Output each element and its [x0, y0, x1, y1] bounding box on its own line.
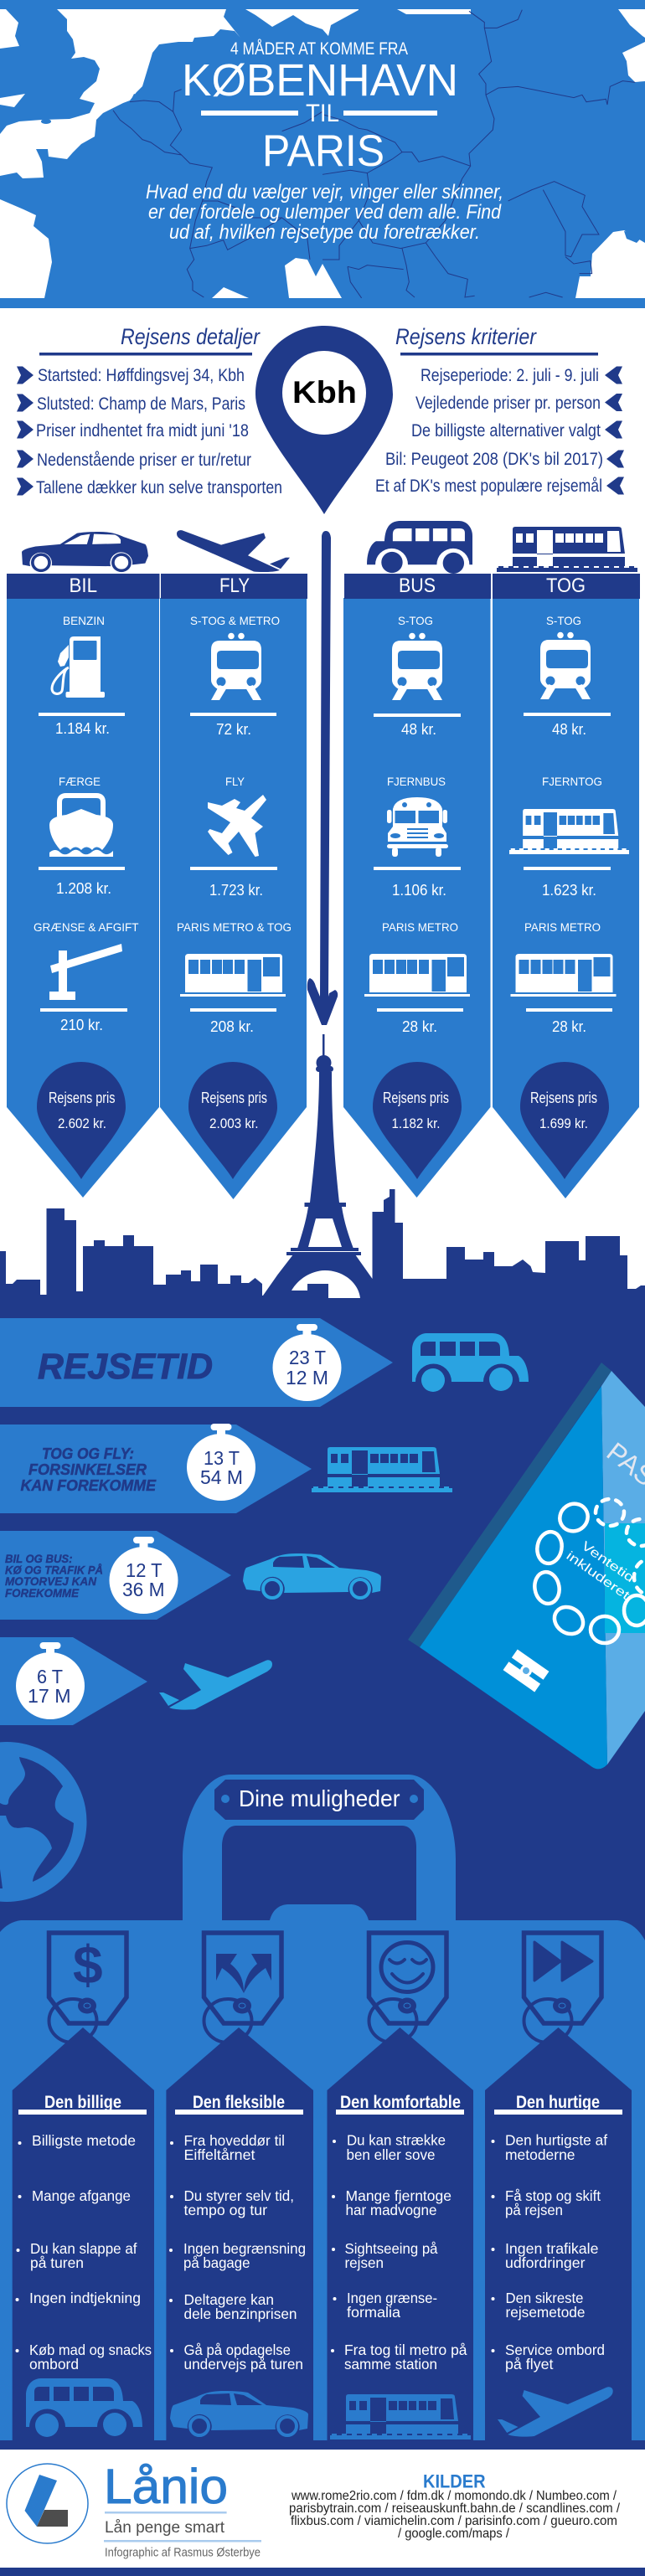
price pin: [188, 1062, 277, 1179]
card list: ombord: [29, 2356, 79, 2372]
item: grænse og afgift: 210 kr.: [60, 1017, 103, 1033]
icon: bus: [412, 1333, 529, 1392]
item: benzin: BENZIN: [63, 614, 105, 627]
heading plate: Dine muligheder: [239, 1785, 400, 1811]
note: TOG OG FLY:: [42, 1445, 134, 1462]
card list: Få stop og skift: [505, 2187, 601, 2204]
card list: samme station: [344, 2356, 437, 2372]
price pin: 1.182 kr.: [392, 1115, 441, 1131]
item: paris metro og tog: PARIS METRO & TOG: [177, 920, 292, 934]
icon: plane: [177, 530, 290, 572]
item: paris metro: [511, 920, 617, 1035]
panel: fly: [160, 574, 307, 1199]
item: s-tog: 48 kr.: [401, 721, 436, 738]
stopwatch: 54 M: [200, 1466, 243, 1488]
title: til: [201, 100, 437, 127]
tag: split arrows: [204, 1933, 281, 2043]
list: Et af DK's mest populære rejsemål: [375, 477, 602, 496]
navy background: [0, 1311, 645, 2450]
card list: Ingen grænse-: [347, 2290, 437, 2306]
item: benzin: [39, 614, 125, 737]
panel: bus: [343, 574, 491, 1198]
icon: globe: [0, 1742, 87, 1902]
icon: train: [330, 2394, 471, 2439]
header: map with title: [0, 0, 645, 308]
card list: Eiffeltårnet: [184, 2146, 255, 2163]
panel: tog: [493, 574, 640, 1198]
sources: parisbytrain.com / reiseauskunft.bahn.de / scandlines.com /: [289, 2501, 621, 2516]
waiting time note: inkluderet: [564, 1548, 632, 1603]
price pin: 1.699 kr.: [539, 1115, 588, 1131]
sources: [289, 2471, 621, 2541]
icon: plane: [159, 1660, 272, 1710]
card list: Køb mad og snacks: [29, 2342, 152, 2358]
card list: udfordringer: [505, 2254, 586, 2271]
card title: Den komfortable: [340, 2093, 461, 2112]
panel: rejsetid bar 2: [0, 1424, 452, 1513]
card list: formalia: [347, 2304, 400, 2321]
stopwatch: 13 T: [204, 1447, 240, 1469]
price pin: Rejsens pris: [530, 1090, 597, 1106]
note: [20, 1445, 157, 1494]
panel: rejsens detaljer: [17, 324, 282, 497]
card list: rejsen: [345, 2254, 384, 2271]
stopwatch: 17 M: [28, 1685, 70, 1707]
stopwatch: [16, 1642, 85, 1719]
card list: Den hurtigste af: [505, 2132, 607, 2149]
heading: REJSETID: [38, 1347, 213, 1387]
card list: ben eller sove: [347, 2146, 436, 2163]
list: [375, 366, 624, 496]
sources: / google.com/maps /: [398, 2527, 510, 2541]
price pin: 2.003 kr.: [209, 1115, 258, 1131]
intro text: Hvad end du vælger vejr, vinger eller skinner,: [146, 181, 503, 204]
stopwatch: 12 T: [126, 1559, 163, 1581]
card list: har madvogne: [345, 2202, 437, 2218]
list: Nedenstående priser er tur/retur: [37, 451, 251, 470]
card list: Du styrer selv tid,: [184, 2187, 294, 2204]
logo: Lånio: Lån penge smart: [105, 2519, 225, 2537]
card list: [169, 2132, 306, 2372]
logo: Lånio: Lånio: [104, 2460, 228, 2514]
card list: Ingen indtjekning: [29, 2290, 141, 2306]
item: færge: [39, 775, 125, 897]
map of Europe: [0, 9, 645, 298]
card list: rejsemetode: [506, 2304, 585, 2321]
icon: car: [170, 2391, 308, 2435]
waiting time note: Ventetid: [579, 1538, 637, 1585]
card list: Mange fjerntoge: [345, 2187, 452, 2204]
header: [161, 574, 307, 599]
item: færge: 1.208 kr.: [56, 880, 111, 897]
passport: [408, 1363, 645, 1769]
header: [493, 574, 640, 599]
panel: suitcase - dine muligheder: [0, 1775, 645, 2440]
list: Priser indhentet fra midt juni '18: [36, 421, 249, 440]
card title: Den hurtige: [516, 2093, 600, 2112]
tag: dollar: [49, 1933, 126, 2043]
note: FORSINKELSER: [28, 1461, 147, 1478]
note: KØ OG TRAFIK PÅ: [5, 1563, 103, 1576]
header: BUS: [399, 574, 436, 597]
item: fjerntog: 1.623 kr.: [542, 882, 596, 899]
stopwatch: [273, 1324, 342, 1401]
panel: rejsetid bar 4: [0, 1637, 272, 1725]
card list: på turen: [30, 2254, 84, 2271]
card list: Billigste metode: [32, 2132, 136, 2149]
tag: dollar: $: [73, 1935, 103, 1995]
credit: Infographic af Rasmus Østerbye: [105, 2546, 261, 2560]
icon: train: [312, 1447, 452, 1492]
note: FOREKOMME: [5, 1586, 80, 1600]
item: s-tog: [374, 614, 461, 738]
card list: på flyet: [505, 2356, 554, 2372]
icon: location pin Kbh: Kbh: [292, 375, 357, 410]
footer bar: [0, 2568, 645, 2576]
panel: rejsens kriterier: [375, 324, 624, 496]
list: [17, 366, 282, 497]
intro text: er der fordele og ulemper ved dem alle. Find: [148, 201, 502, 224]
subtitle: 4 MÅDER AT KOMME FRA: [230, 39, 408, 59]
icon: plane: [498, 2387, 613, 2437]
item: s-tog og metro: [190, 614, 280, 738]
item: s-tog og metro: 72 kr.: [216, 721, 251, 738]
icon: location pin Kbh: [255, 326, 393, 514]
card list: metoderne: [505, 2146, 575, 2163]
note: KAN FOREKOMME: [20, 1477, 157, 1494]
stopwatch: 6 T: [37, 1666, 63, 1687]
title: København: KØBENHAVN: [182, 55, 458, 106]
item: s-tog: S-TOG: [546, 614, 581, 627]
title: til: TIL: [306, 100, 339, 127]
card list: dele benzinprisen: [184, 2306, 297, 2322]
waiting time note: [566, 1541, 632, 1600]
panel: rejsetid bar 3: [0, 1531, 381, 1620]
header: FLY: [219, 574, 250, 597]
list: Bil: Peugeot 208 (DK's bil 2017): [385, 450, 603, 469]
card list: Service ombord: [505, 2342, 605, 2358]
card list: Ingen trafikale: [505, 2240, 598, 2257]
card list: [15, 2132, 152, 2372]
item: s-tog: S-TOG: [398, 614, 433, 627]
title: Paris: PARIS: [262, 126, 384, 176]
card: den hurtige: [485, 2027, 632, 2440]
item: fly: [190, 775, 277, 899]
item: paris metro: 28 kr.: [402, 1018, 437, 1035]
sources heading: KILDER: [423, 2471, 486, 2492]
price pin: [520, 1062, 609, 1179]
card list: Du kan slappe af: [30, 2240, 137, 2257]
card list: Ingen begrænsning: [183, 2240, 306, 2257]
card: den billige: [13, 2027, 154, 2440]
price pin: Rejsens pris: [49, 1090, 116, 1106]
card list: [331, 2132, 467, 2372]
stopwatch: [187, 1424, 255, 1501]
intro text: [146, 181, 503, 244]
heading plate: [214, 1780, 424, 1820]
stopwatch: 12 M: [286, 1367, 328, 1388]
panel: rejsetid bar 1: [0, 1318, 529, 1407]
card list: Fra tog til metro på: [344, 2342, 467, 2358]
rings: [532, 1498, 645, 1643]
item: fly: FLY: [225, 775, 245, 788]
icon: train: [497, 527, 637, 572]
list: Tallene dækker kun selve transporten: [36, 478, 282, 497]
card title: Den fleksible: [193, 2093, 285, 2112]
arrow: København to Paris: [307, 531, 338, 1025]
card list: Mange afgange: [32, 2187, 131, 2204]
suitcase handle and body: [0, 1775, 645, 2440]
card list: Den sikreste: [506, 2290, 583, 2306]
card list: Sightseeing på: [345, 2240, 438, 2257]
card list: tempo og tur: [184, 2202, 267, 2218]
item: paris metro: [364, 920, 470, 1035]
list: Startsted: Høffdingsvej 34, Kbh: [38, 366, 245, 385]
card: den fleksible: [166, 2027, 313, 2440]
item: færge: FÆRGE: [59, 775, 101, 788]
stopwatch: 36 M: [122, 1579, 164, 1600]
heading: Rejsens detaljer: [121, 324, 261, 349]
item: s-tog og metro: S-TOG & METRO: [190, 614, 280, 627]
list: Vejledende priser pr. person: [415, 394, 601, 413]
card list: Fra hoveddør til: [184, 2132, 285, 2149]
card list: [491, 2132, 607, 2372]
intro text: ud af, hvilken rejsetype du foretrækker.: [169, 221, 480, 244]
item: fjernbus: [374, 775, 461, 899]
header: TOG: [546, 574, 586, 597]
item: s-tog: 48 kr.: [552, 721, 586, 738]
header: [344, 574, 491, 599]
card list: Du kan strække: [347, 2132, 446, 2149]
item: paris metro: PARIS METRO: [524, 920, 601, 934]
price pin: Rejsens pris: [201, 1090, 267, 1106]
price pin: [37, 1062, 126, 1179]
logo: Lånio: [7, 2460, 261, 2560]
emblem: [503, 1650, 549, 1692]
sources: flixbus.com / viamichelin.com / parisinfo.com / gueuro.com: [291, 2514, 617, 2528]
item: grænse og afgift: GRÆNSE & AFGIFT: [34, 920, 139, 934]
item: paris metro: 28 kr.: [552, 1018, 586, 1035]
note: [5, 1552, 103, 1600]
list: De billigste alternativer valgt: [411, 421, 601, 440]
item: paris metro og tog: 208 kr.: [210, 1018, 254, 1035]
note: BIL OG BUS:: [5, 1552, 72, 1565]
card list: Deltagere kan: [184, 2291, 274, 2308]
card list: på bagage: [183, 2254, 250, 2271]
card list: på rejsen: [505, 2202, 563, 2218]
stopwatch: 23 T: [289, 1347, 326, 1368]
item: benzin: 1.184 kr.: [55, 720, 110, 737]
list: Rejseperiode: 2. juli - 9. juli: [421, 366, 599, 385]
card: den komfortable: [327, 2027, 473, 2440]
item: fjerntog: [509, 775, 629, 899]
item: fjerntog: FJERNTOG: [542, 775, 602, 788]
tag: smiley: [369, 1933, 446, 2043]
item: grænse og afgift: [34, 920, 139, 1033]
price pin: 2.602 kr.: [58, 1115, 106, 1131]
stopwatch: [109, 1537, 178, 1614]
panel: bil: [7, 574, 159, 1198]
card title: Den billige: [44, 2093, 121, 2112]
price pin: Rejsens pris: [383, 1090, 449, 1106]
icon: car: [243, 1553, 381, 1598]
sources: www.rome2rio.com / fdm.dk / momondo.dk / Numbeo.com /: [291, 2489, 617, 2503]
heading: Rejsens kriterier: [395, 324, 537, 349]
header: BIL: [69, 574, 97, 597]
card list: undervejs på turen: [184, 2356, 303, 2372]
icon: car: [22, 532, 148, 570]
note: MOTORVEJ KAN: [5, 1574, 97, 1588]
item: fjernbus: 1.106 kr.: [392, 882, 446, 899]
skyline with Eiffel tower: [0, 1034, 645, 1315]
item: s-tog: [524, 614, 611, 738]
tag: fast forward: [524, 1933, 601, 2043]
icon: bus: [26, 2378, 142, 2437]
header: [7, 574, 159, 599]
price pin: [373, 1062, 462, 1179]
card list: Gå på opdagelse: [184, 2342, 291, 2358]
icon: bus: [367, 521, 472, 574]
list: Slutsted: Champ de Mars, Paris: [37, 394, 245, 414]
item: paris metro og tog: [177, 920, 292, 1035]
item: fly: 1.723 kr.: [209, 882, 263, 899]
item: fjernbus: FJERNBUS: [387, 775, 446, 788]
item: paris metro: PARIS METRO: [382, 920, 458, 934]
